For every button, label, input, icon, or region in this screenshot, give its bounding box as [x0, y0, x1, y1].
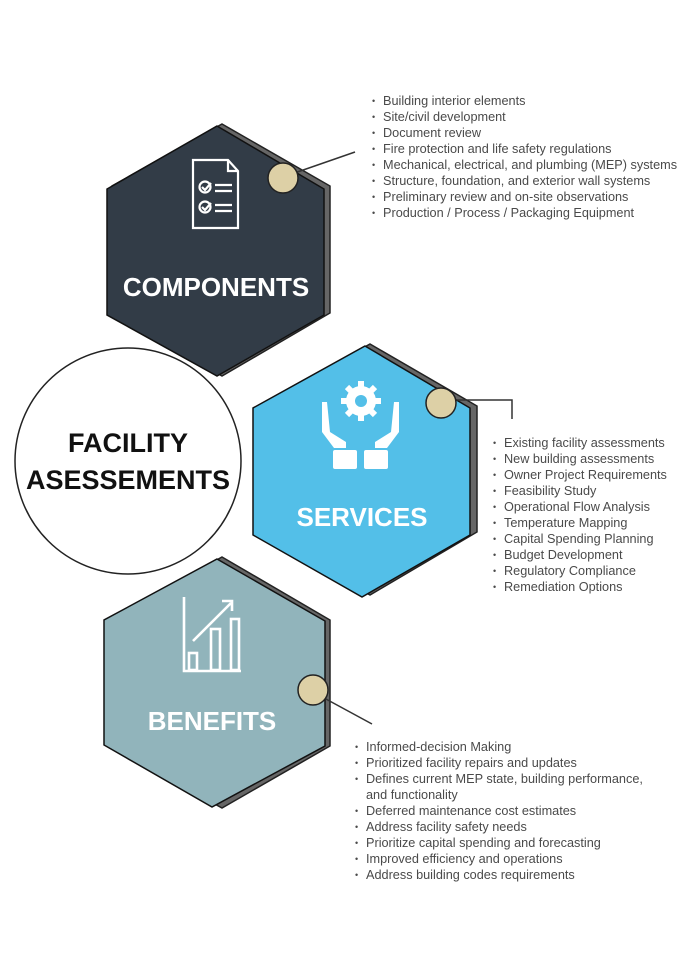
list: benefits	[355, 740, 643, 882]
list: components: Document review	[383, 126, 481, 140]
list: components: Structure, foundation, and exterior wall systems	[383, 174, 650, 188]
list: components: Production / Process / Packaging Equipment	[383, 206, 634, 220]
list: benefits: Address facility safety needs	[366, 820, 527, 834]
list: benefits: Address building codes requirements	[366, 868, 575, 882]
icon: checklist	[193, 160, 238, 228]
list: components: Site/civil development	[383, 110, 506, 124]
list: components: Fire protection and life safety regulations	[383, 142, 612, 156]
list: components: Building interior elements	[383, 94, 525, 108]
list: services: Temperature Mapping	[504, 516, 627, 530]
list: services: Budget Development	[504, 548, 622, 562]
title circle: FACILITY	[68, 428, 188, 458]
list: benefits: Improved efficiency and operations	[366, 852, 563, 866]
hexagon: services	[253, 344, 477, 597]
title circle: ASESSEMENTS	[26, 465, 230, 495]
connector: components	[268, 152, 355, 193]
icon: bar chart	[184, 597, 241, 671]
list: benefits: Prioritized facility repairs and updates	[366, 756, 577, 770]
list: services: Remediation Options	[504, 580, 622, 594]
list: services: Capital Spending Planning	[504, 532, 654, 546]
hexagon: benefits	[104, 557, 330, 808]
connector: services	[426, 388, 512, 419]
list: services: Regulatory Compliance	[504, 564, 636, 578]
list: services: Existing facility assessments	[504, 436, 665, 450]
list: benefits: Defines current MEP state, building performance,	[366, 772, 643, 786]
list: components: Mechanical, electrical, and plumbing (MEP) systems	[383, 158, 677, 172]
list: benefits: Deferred maintenance cost estimates	[366, 804, 576, 818]
heading: benefits: BENEFITS	[148, 706, 276, 736]
list: benefits: and functionality	[366, 788, 458, 802]
list: benefits: Informed-decision Making	[366, 740, 511, 754]
list: benefits: Prioritize capital spending and forecasting	[366, 836, 601, 850]
list: services: Feasibility Study	[504, 484, 596, 498]
list: components: Preliminary review and on-site observations	[383, 190, 628, 204]
list: services: Owner Project Requirements	[504, 468, 667, 482]
title circle	[15, 348, 241, 574]
heading: services: SERVICES	[296, 502, 428, 532]
heading: components: COMPONENTS	[123, 272, 309, 302]
list: services	[493, 436, 667, 594]
hexagon: components	[107, 124, 330, 376]
icon: hands with gear	[322, 381, 399, 469]
list: services: Operational Flow Analysis	[504, 500, 650, 514]
list: components	[372, 94, 677, 220]
list: services: New building assessments	[504, 452, 654, 466]
connector: benefits	[298, 675, 372, 724]
